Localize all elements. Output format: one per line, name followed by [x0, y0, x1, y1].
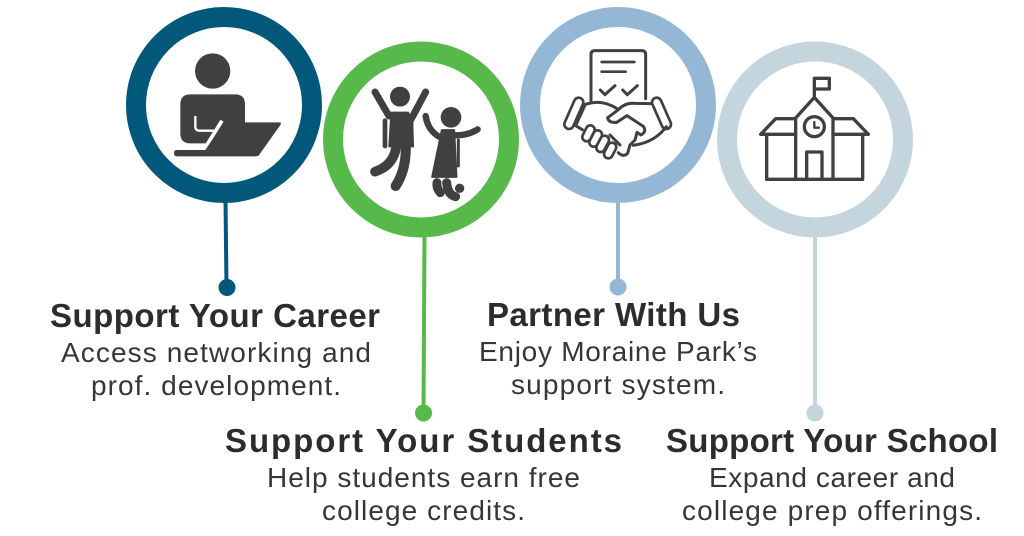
- icon: handshake and document: [569, 51, 666, 155]
- text: school description: Expand career and: [709, 462, 955, 493]
- text: students description: Help students earn free: [267, 462, 580, 493]
- heading: support your students: Support Your Students: [225, 422, 622, 459]
- heading: support your career: Support Your Career: [50, 297, 380, 334]
- icon: school building: [761, 78, 868, 179]
- text: students description: [267, 462, 580, 526]
- connector dot: partner: [610, 278, 626, 296]
- panel: support your students: [225, 52, 622, 526]
- panel: partner with us: [479, 17, 757, 400]
- connector dot: students: [415, 404, 432, 422]
- text: students description: college credits.: [322, 495, 525, 526]
- ring: career: [136, 17, 312, 193]
- heading: support your school: Support Your School: [666, 422, 998, 459]
- text: partner description: support system.: [511, 369, 725, 400]
- connector dot: career: [218, 279, 236, 296]
- panel: support your career: [50, 17, 380, 401]
- icon: jumping students: [375, 87, 478, 197]
- text: partner description: Enjoy Moraine Park’s: [479, 336, 757, 367]
- connector dot: school: [806, 404, 824, 422]
- text: career description: Access networking and: [61, 337, 371, 368]
- connector line: career: [226, 200, 227, 287]
- connector line: partner: [616, 200, 620, 287]
- connector line: school: [813, 235, 817, 413]
- ring: partner: [530, 17, 706, 193]
- text: school description: [682, 462, 982, 526]
- text: career description: [61, 337, 371, 401]
- panel: support your school: [666, 52, 998, 526]
- ring: students: [333, 52, 509, 228]
- text: school description: college prep offerings.: [682, 495, 982, 526]
- icon: person at laptop: [174, 53, 281, 156]
- text: career description: prof. development.: [91, 370, 341, 401]
- connector line: students: [424, 235, 425, 413]
- text: partner description: [479, 336, 757, 400]
- heading: partner with us: Partner With Us: [487, 296, 740, 333]
- ring: school: [727, 52, 903, 228]
